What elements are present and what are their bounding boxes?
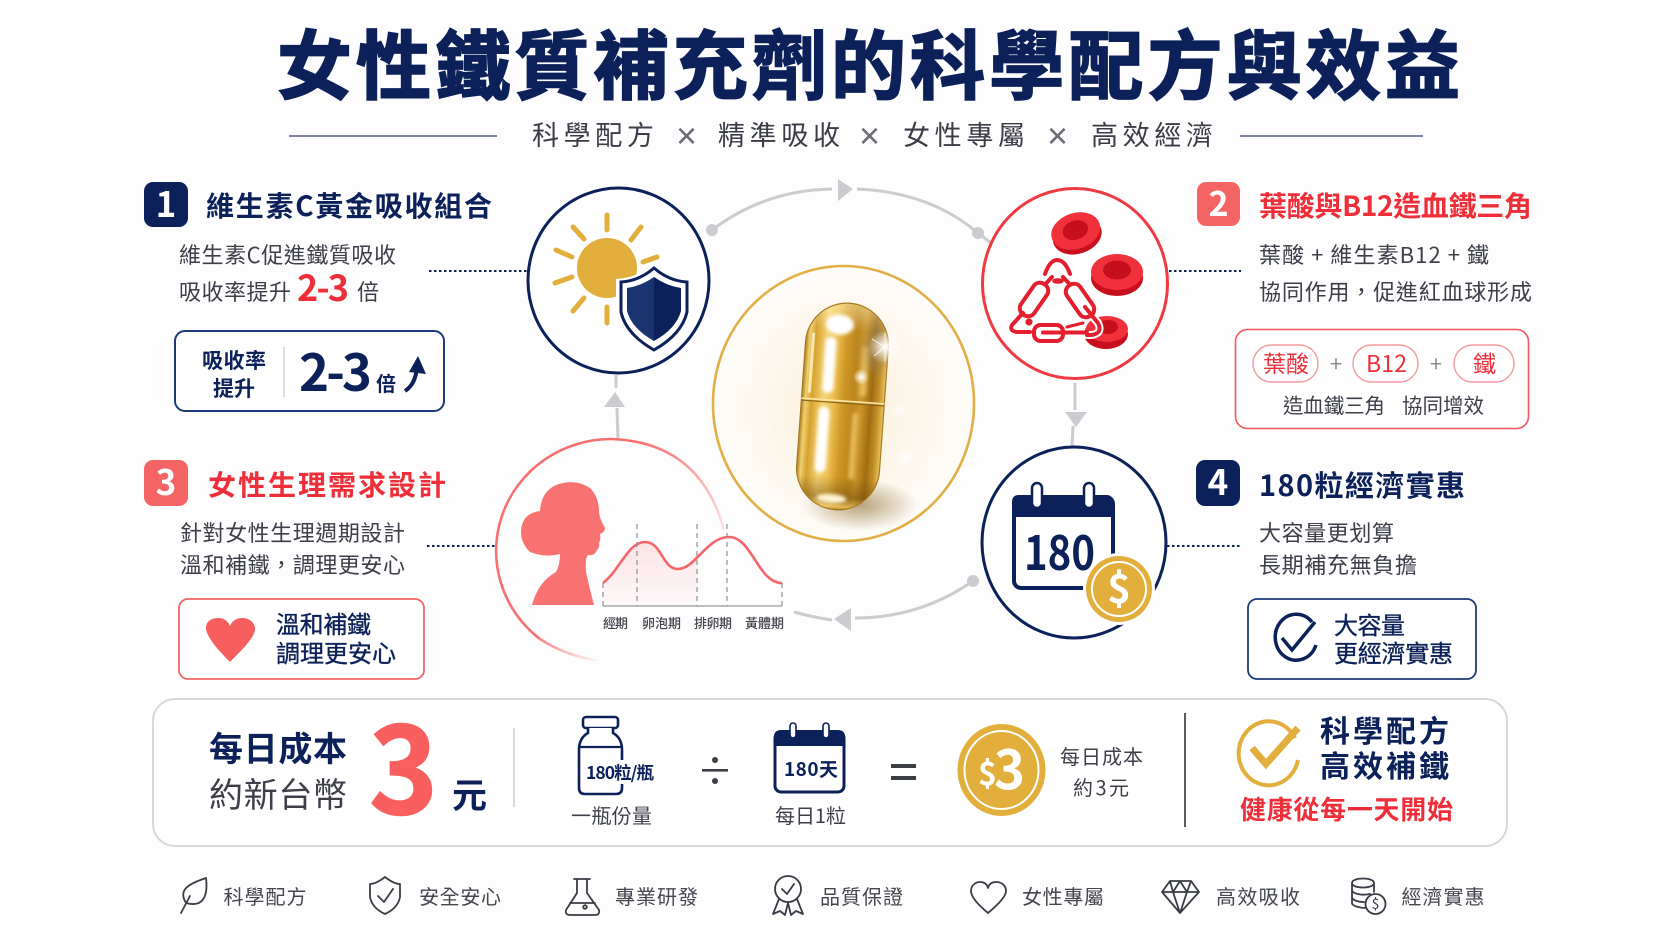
callout box 2 [1236,330,1528,428]
feature: 女性專屬: 女性專屬 [1022,881,1104,910]
callout box 4: 大容量 [1334,606,1405,641]
callout box 2: B12 [1366,345,1407,379]
text block 1: 吸收率提升 [179,275,291,307]
feature: 經濟實惠: 經濟實惠 [1402,881,1484,910]
daily cost headline: 每日成本 [209,722,347,771]
callout box 2: + [1430,347,1442,379]
icon: red blood cells and chain [982,188,1168,378]
icon: bottle [571,717,654,829]
heading 3: 女性生理需求設計 [208,464,446,504]
feature icon row [181,876,1484,915]
slogan: 高效補鐵 [1320,742,1449,786]
text block 1: 2-3 [297,260,349,312]
badge 4 [1196,455,1240,506]
callout box 1 [175,331,444,411]
subtitle: 女性專屬 [903,114,1025,153]
feature: 品質保證: 品質保證 [820,881,903,910]
subtitle: 精準吸收 [718,114,840,153]
icon: calendar 180 days: 180天 [784,755,838,782]
connector [1167,545,1242,547]
daily cost note: 每日成本 [1060,741,1143,770]
feature: 經濟實惠 [1352,878,1484,914]
panel: daily cost [153,675,1507,849]
feature: 科學配方 [181,878,306,913]
panel: 1 vitamin C [144,177,709,411]
subtitle: × [859,115,880,156]
callout box 2: 協同增效 [1402,389,1484,419]
badge 3: 3 [156,455,176,506]
icon: bottle: 一瓶份量 [571,800,652,829]
callout box 3: 調理更安心 [276,634,396,669]
cycle chart [603,524,784,632]
text block 4 [1259,516,1417,580]
callout box 2: 鐵 [1473,345,1496,379]
feature: 專業研發: 專業研發 [615,881,698,910]
callout box 3 [179,599,424,679]
slogan: 健康從每一天開始 [1240,790,1453,827]
icon: gold capsule [794,300,891,513]
text block 2 [1259,238,1532,307]
text block 3 [180,516,405,580]
heading 4: 180粒經濟實惠 [1259,463,1465,505]
icon: calendar and coin: $ [1107,557,1131,615]
feature: 品質保證 [773,876,903,915]
callout box 4 [1248,599,1476,679]
center capsule circle [713,266,974,541]
feature: 經濟實惠: $ [1372,894,1379,914]
subtitle: 科學配方 [532,114,654,153]
daily cost headline [209,675,487,849]
icon: coin $3: $ [978,749,997,795]
daily cost note: 約3元 [1073,772,1129,801]
text block 3: 針對女性生理週期設計 [180,516,405,548]
callout box 1: 倍 [376,368,396,397]
badge 1 [144,177,188,228]
feature: 高效吸收 [1162,881,1300,913]
subtitle: 高效經濟 [1091,114,1213,153]
callout box 2: 造血鐵三角 [1283,389,1385,419]
flow arrows between circles [604,179,1087,631]
daily cost note [1060,741,1143,801]
feature: 科學配方: 科學配方 [224,881,306,910]
icon: sun and shield [528,188,709,373]
subtitle: × [1047,115,1068,156]
feature: 安全安心: 安全安心 [419,881,501,910]
cycle chart: 經期 [603,613,628,632]
callout box 2: + [1330,347,1342,379]
callout box 1: 2-3 [299,332,372,406]
slogan: 科學配方 [1320,707,1449,751]
icon: calendar 180 days [774,723,846,829]
badge 2 [1197,177,1240,226]
badge 3 [144,455,188,506]
feature: 安全安心 [370,877,501,914]
connector [429,270,527,272]
callout box 3: 溫和補鐵 [276,605,371,640]
text block 1 [179,238,396,312]
icon: calendar and coin [982,447,1166,638]
icon: woman silhouette and cycle chart [496,439,784,661]
callout box 2: 葉酸 [1263,345,1309,379]
badge 2: 2 [1208,177,1229,226]
panel: 2 folate and B12 [982,177,1532,428]
connector [427,545,496,547]
feature: 專業研發 [566,879,698,915]
panel: 3 female physiology [144,439,784,679]
icon: bottle: 180粒/瓶 [586,760,654,785]
icon: coin $3: 3 [994,726,1025,805]
panel: 4 180 capsules [982,447,1476,679]
callout box 1: 提升 [213,373,255,403]
subtitle [289,114,1423,156]
equals sign [891,764,916,780]
icon: calendar 180 days: 每日1粒 [775,800,846,829]
callout box 4: 更經濟實惠 [1334,634,1453,669]
cycle chart: 排卵期 [694,613,732,632]
slogan [1240,707,1453,827]
text block 4: 大容量更划算 [1259,516,1394,548]
icon: coin $3 [958,724,1046,816]
feature: 女性專屬 [971,881,1104,913]
subtitle: × [676,115,697,156]
text block 3: 溫和補鐵，調理更安心 [180,548,405,580]
text block 1: 倍 [357,275,379,307]
text block 2: 葉酸 + 維生素B12 + 鐵 [1259,238,1489,270]
heading 1: 維生素C黃金吸收組合 [206,185,492,225]
connector [1169,270,1241,272]
daily cost headline: 元 [452,768,487,819]
title: 女性鐵質補充劑的科學配方與效益 [277,6,1460,115]
text block 2: 協同作用，促進紅血球形成 [1259,275,1532,307]
text block 4: 長期補充無負擔 [1259,548,1417,580]
feature: 高效吸收: 高效吸收 [1216,881,1300,910]
cycle chart: 卵泡期 [642,613,681,632]
woman silhouette [521,482,605,605]
heading 2: 葉酸與B12造血鐵三角 [1259,185,1532,225]
badge 1: 1 [156,177,176,228]
cycle chart: 黃體期 [745,613,784,632]
callout box 1: 吸收率 [202,345,266,375]
badge 4: 4 [1208,455,1228,506]
divide sign [702,757,728,784]
text block 1: 維生素C促進鐵質吸收 [179,238,396,270]
daily cost headline: 約新台幣 [209,768,347,817]
icon: calendar and coin: 180 [1024,515,1095,584]
daily cost headline: 3 [369,675,438,849]
icon: gold check [1239,721,1298,785]
